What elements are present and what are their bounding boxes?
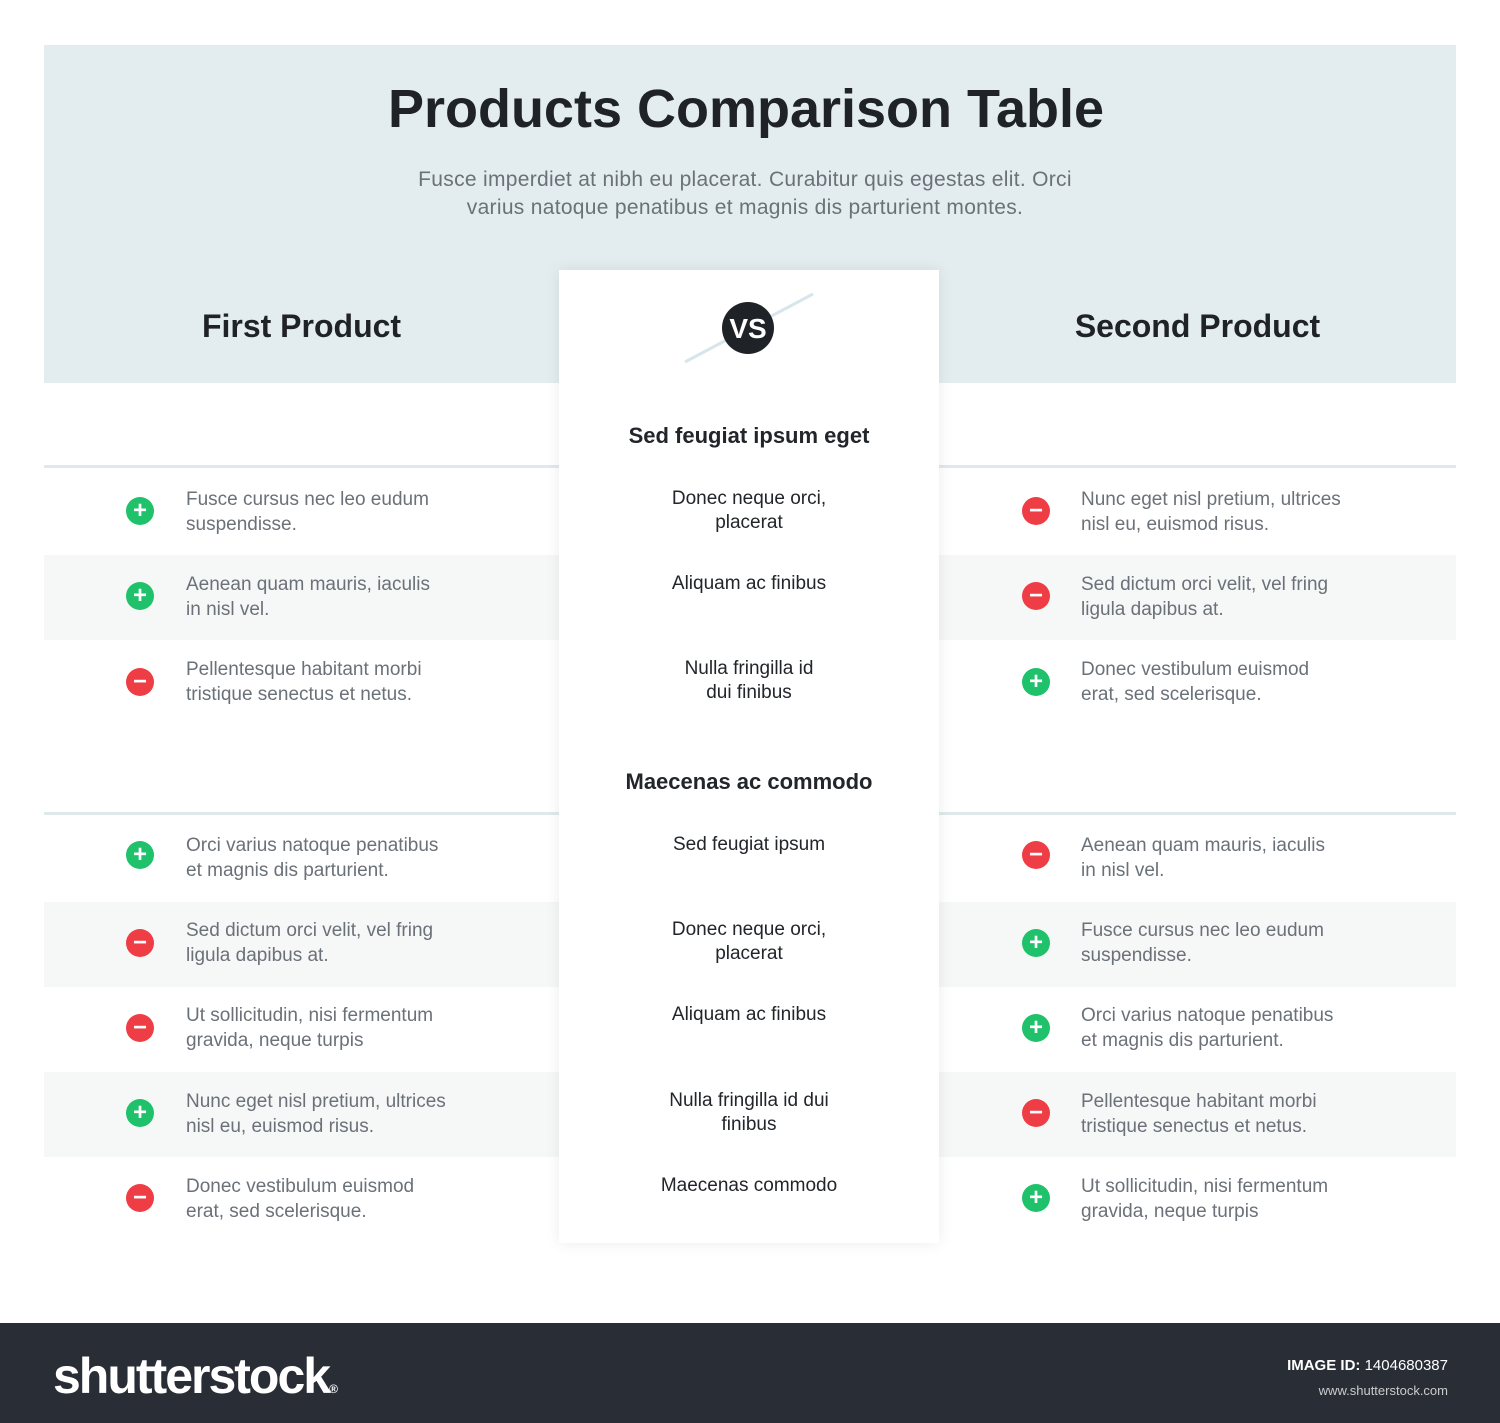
section 2 rows: −	[1029, 841, 1043, 868]
section 2 rows: +	[1029, 1014, 1043, 1041]
section 1 rows: Donec neque orci,	[672, 488, 826, 509]
section 2 rows: nisl eu, euismod risus.	[186, 1116, 374, 1137]
center heading 2: Maecenas ac commodo	[626, 769, 872, 794]
section 1 rows: nisl eu, euismod risus.	[1081, 514, 1269, 535]
center heading 1: Sed feugiat ipsum eget	[629, 423, 869, 448]
section 2 rows: et magnis dis parturient.	[186, 860, 389, 881]
footer image id: IMAGE ID: 1404680387	[1287, 1357, 1448, 1374]
section 1 rows: +	[133, 582, 147, 609]
footer image id: www.shutterstock.com	[1319, 1383, 1448, 1398]
section 2 rows: et magnis dis parturient.	[1081, 1030, 1284, 1051]
section 1 rows: erat, sed scelerisque.	[1081, 684, 1262, 705]
section 1 rows: suspendisse.	[186, 514, 297, 535]
section 1 rows: placerat	[715, 512, 783, 533]
section 1 rows: +	[133, 497, 147, 524]
section 1 rows: Aenean quam mauris, iaculis	[186, 574, 430, 595]
section 2 rows: Nulla fringilla id dui	[669, 1090, 829, 1111]
section 2 rows: Ut sollicitudin, nisi fermentum	[186, 1005, 433, 1026]
section 2 rows: Sed feugiat ipsum	[673, 834, 825, 855]
heading: second product: Second Product	[1075, 308, 1320, 344]
section 1 rows: ligula dapibus at.	[1081, 599, 1224, 620]
section 1 rows: −	[133, 668, 147, 695]
subtitle	[418, 168, 1072, 219]
header band	[44, 45, 1456, 383]
section 1 rows: Nunc eget nisl pretium, ultrices	[1081, 489, 1341, 510]
footer image id	[1287, 1357, 1448, 1398]
footer bar	[0, 1323, 1500, 1423]
section 1 rows: Fusce cursus nec leo eudum	[186, 489, 429, 510]
section 2 rows: gravida, neque turpis	[1081, 1201, 1258, 1222]
section 2 rows: Fusce cursus nec leo eudum	[1081, 920, 1324, 941]
section 1 rows: Aliquam ac finibus	[672, 573, 826, 594]
section 2 rows: tristique senectus et netus.	[1081, 1116, 1307, 1137]
heading: first product: First Product	[202, 308, 401, 344]
subtitle: Fusce imperdiet at nibh eu placerat. Curabitur quis egestas elit. Orci	[418, 168, 1072, 191]
section 2 rows: gravida, neque turpis	[186, 1030, 363, 1051]
section 2 rows: Aliquam ac finibus	[672, 1004, 826, 1025]
section 2 rows: in nisl vel.	[1081, 860, 1164, 881]
section 2 rows: finibus	[722, 1114, 776, 1135]
section 2 rows: Orci varius natoque penatibus	[1081, 1005, 1333, 1026]
section 2 rows: −	[133, 1184, 147, 1211]
section 1 rows: in nisl vel.	[186, 599, 269, 620]
section 1 rows: Nulla fringilla id	[685, 658, 813, 679]
section 2 rows: +	[1029, 929, 1043, 956]
section 2 rows: −	[133, 1014, 147, 1041]
section 2 rows: suspendisse.	[1081, 945, 1192, 966]
section 2 rows: Pellentesque habitant morbi	[1081, 1091, 1317, 1112]
section 2 rows: Maecenas commodo	[661, 1175, 837, 1196]
section 2 rows: −	[133, 929, 147, 956]
section 1 rows: dui finibus	[706, 682, 792, 703]
section 2 rows: ligula dapibus at.	[186, 945, 329, 966]
footer logo: shutterstock®	[53, 1348, 336, 1404]
section 2 rows: Donec vestibulum euismod	[186, 1176, 414, 1197]
section 2 rows: Nunc eget nisl pretium, ultrices	[186, 1091, 446, 1112]
section 1 rows: −	[1029, 582, 1043, 609]
section 1 rows: −	[1029, 497, 1043, 524]
title: Products Comparison Table	[388, 79, 1104, 139]
icon: vs: VS	[729, 313, 767, 344]
section 2 rows: −	[1029, 1099, 1043, 1126]
section 2 rows	[126, 834, 1333, 1222]
section 2 rows: Ut sollicitudin, nisi fermentum	[1081, 1176, 1328, 1197]
section 1 rows: Sed dictum orci velit, vel fring	[1081, 574, 1328, 595]
section 2 rows: Aenean quam mauris, iaculis	[1081, 835, 1325, 856]
section 2 rows: +	[1029, 1184, 1043, 1211]
subtitle: varius natoque penatibus et magnis dis parturient montes.	[467, 196, 1023, 219]
section 1 rows: tristique senectus et netus.	[186, 684, 412, 705]
section 2 rows: placerat	[715, 943, 783, 964]
center card	[559, 270, 939, 1243]
section 2 rows: +	[133, 841, 147, 868]
section 1 rows	[126, 488, 1341, 705]
section 2 rows: erat, sed scelerisque.	[186, 1201, 367, 1222]
section 2 rows: Orci varius natoque penatibus	[186, 835, 438, 856]
section 2 rows: Sed dictum orci velit, vel fring	[186, 920, 433, 941]
section 2 rows: Donec neque orci,	[672, 919, 826, 940]
section 1 rows: Pellentesque habitant morbi	[186, 659, 422, 680]
section 1 rows: Donec vestibulum euismod	[1081, 659, 1309, 680]
section 2 rows: +	[133, 1099, 147, 1126]
section 1 rows: +	[1029, 668, 1043, 695]
icon: vs	[684, 292, 814, 364]
